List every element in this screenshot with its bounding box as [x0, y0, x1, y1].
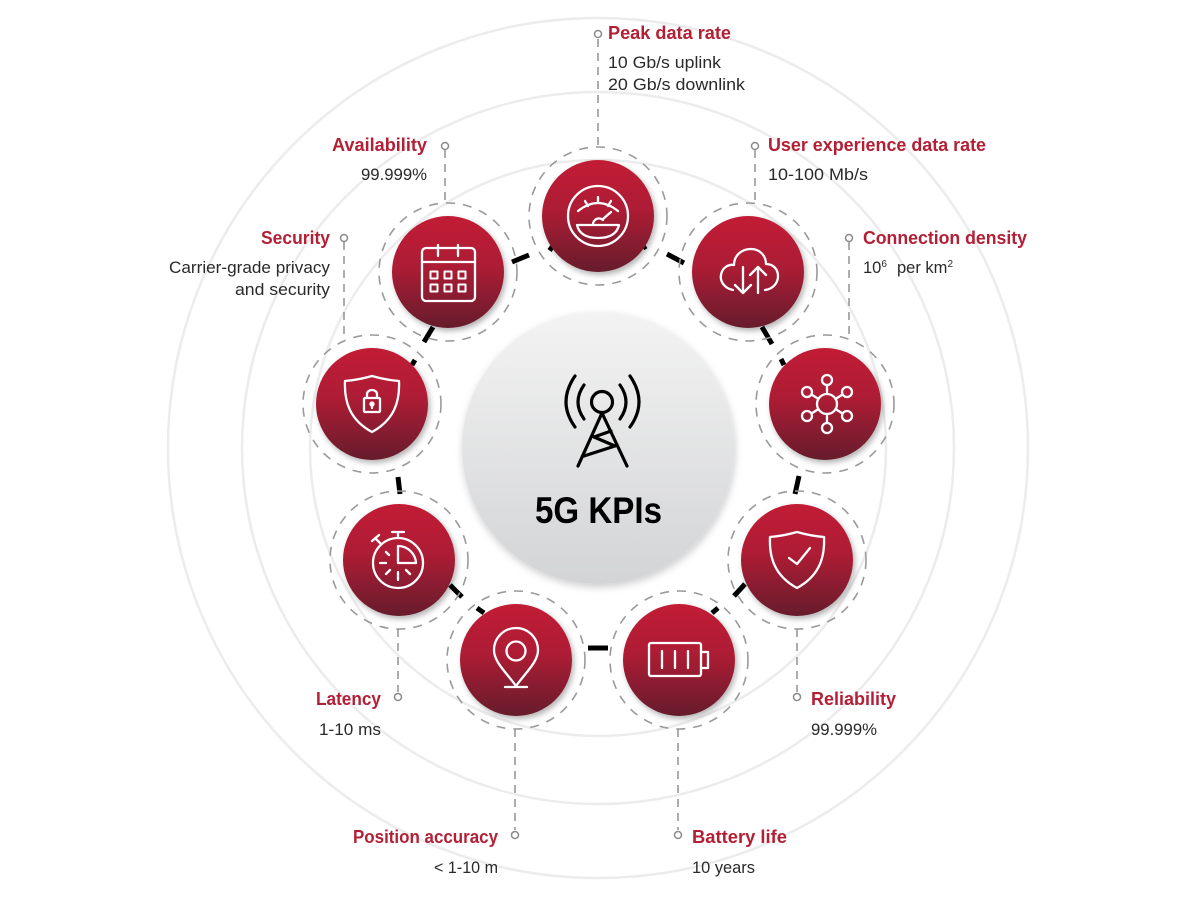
- icon: cloud with arrows: [721, 249, 778, 293]
- label: latency: Latency: [316, 688, 382, 709]
- label: user experience data rate: 10-100 Mb/s: [768, 166, 868, 184]
- label: battery life: Battery life: [692, 826, 787, 847]
- label: availability: 99.999%: [361, 166, 427, 184]
- label: reliability: [794, 629, 897, 739]
- label: security: [169, 227, 348, 340]
- node: security shield with lock: [303, 335, 441, 473]
- concentric background rings: [168, 18, 1028, 878]
- node: availability calendar: [379, 203, 517, 341]
- label: connection density: 2: [947, 259, 953, 270]
- label: peak data rate: [594, 22, 746, 148]
- label: peak data rate: 10 Gb/s uplink: [608, 54, 722, 72]
- label: position accuracy: [353, 729, 518, 877]
- node: user experience data rate cloud: [679, 203, 817, 341]
- label: connection density: Connection density: [863, 227, 1028, 248]
- icon: shield with padlock: [345, 376, 399, 432]
- icon: antenna tower: [566, 376, 639, 466]
- icon: gauge: [568, 186, 628, 246]
- icon: location pin: [494, 628, 538, 687]
- label: latency: [316, 629, 402, 739]
- label: connection density: per km: [897, 259, 947, 277]
- node: latency stopwatch: [330, 491, 468, 629]
- label: reliability: Reliability: [811, 688, 897, 709]
- label: user experience data rate: [752, 134, 986, 203]
- icon: stopwatch: [372, 532, 423, 588]
- hub title: 5G KPIs: [535, 490, 662, 531]
- label: peak data rate: Peak data rate: [608, 22, 731, 43]
- label: security: Carrier-grade privacy: [169, 259, 331, 277]
- label: battery life: 10 years: [692, 859, 755, 877]
- label: latency: 1-10 ms: [319, 721, 381, 739]
- label: availability: Availability: [332, 134, 428, 155]
- label: battery life: [674, 729, 787, 877]
- node: reliability shield: [728, 491, 866, 629]
- label: peak data rate: 20 Gb/s downlink: [608, 76, 746, 94]
- icon: network hub: [802, 375, 852, 433]
- label: availability: [332, 134, 448, 205]
- icon: battery: [649, 643, 708, 676]
- label: position accuracy: < 1-10 m: [434, 859, 498, 877]
- label: connection density: 6: [881, 259, 887, 270]
- icon: calendar: [422, 245, 475, 301]
- label: user experience data rate: User experience data rate: [768, 134, 986, 155]
- node: connection density network: [756, 335, 894, 473]
- node: position accuracy pin: [447, 591, 585, 729]
- node: battery life: [610, 591, 748, 729]
- label: security: Security: [261, 227, 331, 248]
- center hub: 5G KPIs: [462, 312, 734, 584]
- node: peak data rate gauge: [529, 147, 667, 285]
- label: position accuracy: Position accuracy: [353, 826, 499, 847]
- label: connection density: 10: [863, 259, 881, 277]
- icon: shield with check: [770, 532, 824, 588]
- label: connection density: [846, 227, 1028, 340]
- label: security: and security: [235, 281, 331, 299]
- connector ticks between KPI nodes: [398, 246, 799, 648]
- label: reliability: 99.999%: [811, 721, 877, 739]
